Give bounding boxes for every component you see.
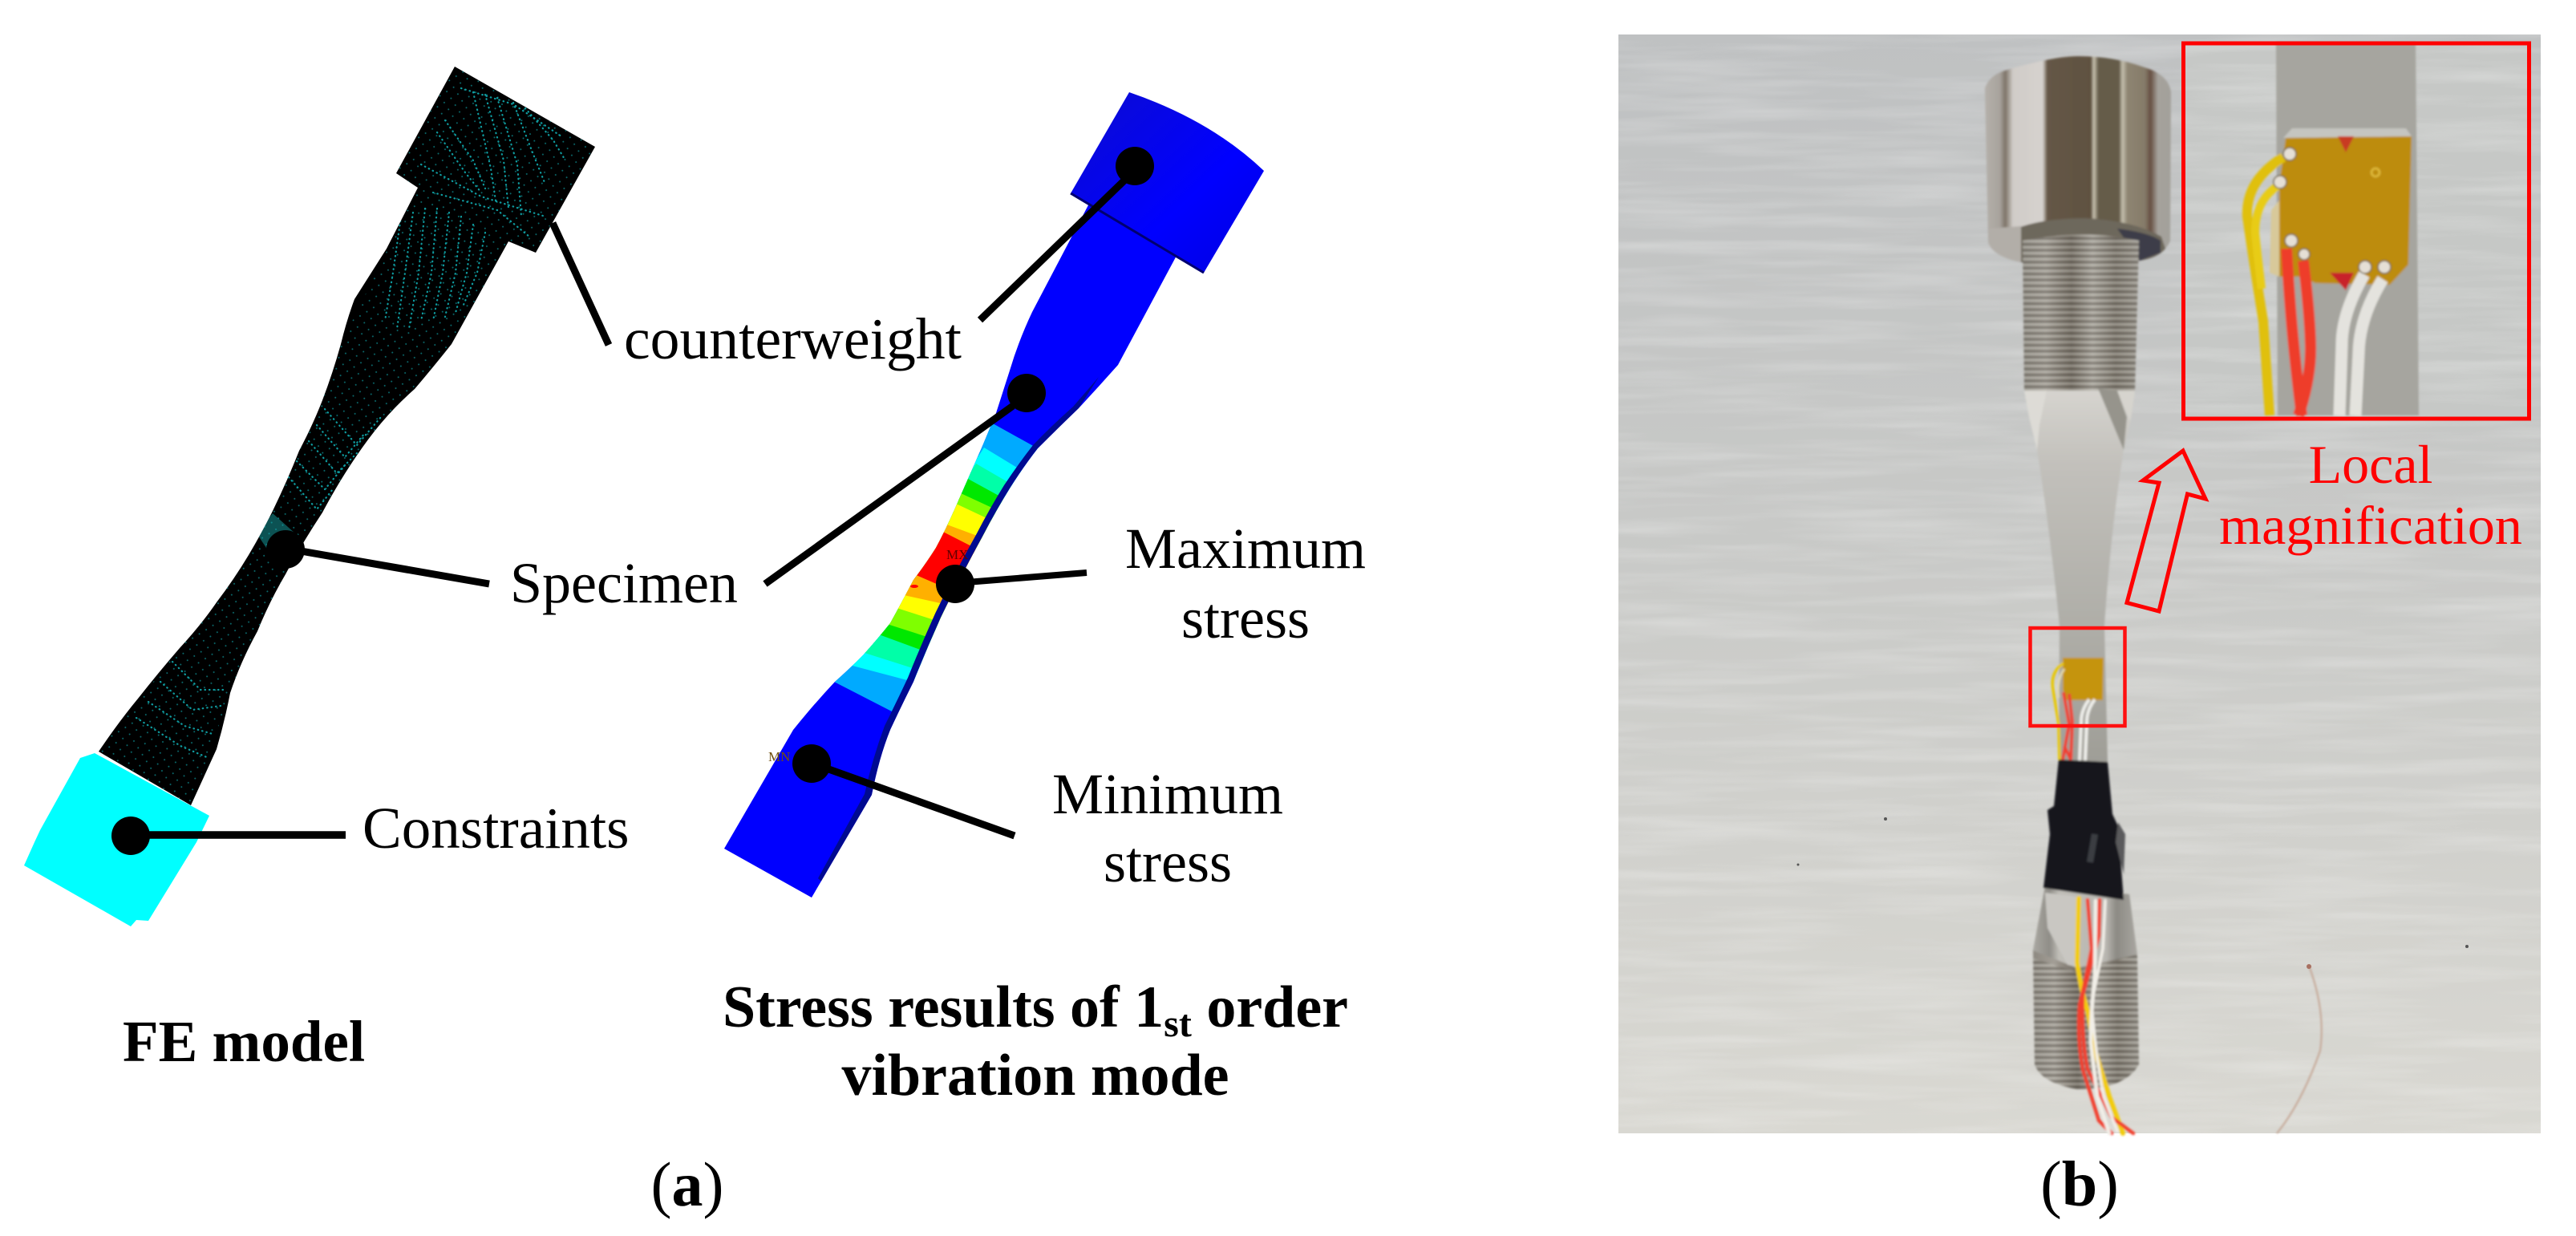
panel: FE model mesh: [24, 67, 595, 926]
panel: photograph of specimen: [1618, 34, 2541, 1133]
inset kapton patch: [2279, 136, 2412, 285]
lower wires: [2077, 898, 2133, 1133]
label: Minimum stress: Minimum: [1052, 762, 1283, 826]
callout: counterweight right: [980, 147, 1154, 320]
label: Maximum stress: Maximum: [1125, 517, 1366, 581]
stray thin wire: [2277, 966, 2322, 1133]
callout: maximum stress: [936, 517, 1366, 650]
lower cone and thread: [2033, 886, 2139, 1089]
label: Constraints: Constraints: [363, 796, 630, 861]
inset red wires: [2286, 249, 2302, 415]
label: Specimen: Specimen: [510, 551, 738, 615]
inset: local magnification: [2181, 42, 2529, 419]
counterweight head: [1985, 56, 2171, 262]
label: Local magnification: Local: [2309, 434, 2432, 495]
callout: counterweight left: [553, 223, 962, 371]
MN marker: MN: [768, 749, 790, 764]
label: Maximum stress: stress: [1181, 586, 1310, 650]
heading: stress results: Stress results of 1: [723, 975, 1164, 1040]
heading: stress results: st: [1164, 1003, 1192, 1045]
callout: constraints: [111, 796, 630, 861]
tapered shaft: [2024, 388, 2135, 762]
callout: minimum stress: [792, 744, 1283, 894]
callout: specimen: [266, 374, 1046, 615]
panel: stress result model: [724, 92, 1264, 898]
label: Minimum stress: stress: [1104, 830, 1232, 894]
strain gauge (small): [2052, 658, 2104, 760]
caption: (a): (a): [651, 1149, 723, 1219]
colour bands of stress: [834, 423, 1038, 711]
small selection box: [2031, 628, 2125, 726]
inset white wires: [2339, 274, 2364, 415]
constraints block: [24, 753, 209, 926]
heading: stress results: vibration mode: [841, 1043, 1229, 1108]
dark side face: [818, 377, 1099, 882]
caption: (b): (b): [2040, 1149, 2119, 1220]
inset solder joints: [2274, 148, 2391, 274]
label: counterweight: counterweight: [624, 306, 962, 371]
label: Local magnification: magnification: [2219, 495, 2522, 556]
inset yellow wires: [2247, 157, 2283, 415]
arrow to inset: [2127, 451, 2205, 611]
photo specks: [1796, 817, 2469, 969]
photo background: [1618, 34, 2541, 1133]
upper thread: [2023, 234, 2139, 391]
black tape: [2043, 760, 2124, 900]
stressed specimen body: [724, 201, 1178, 898]
inset bar: [2276, 42, 2419, 415]
counterweight cap: [1071, 92, 1264, 273]
heading: stress results: order: [1192, 975, 1348, 1040]
MX marker: MX: [946, 547, 968, 562]
heading: FE model: FE model: [123, 1009, 365, 1074]
specimen mesh body: [99, 67, 595, 805]
